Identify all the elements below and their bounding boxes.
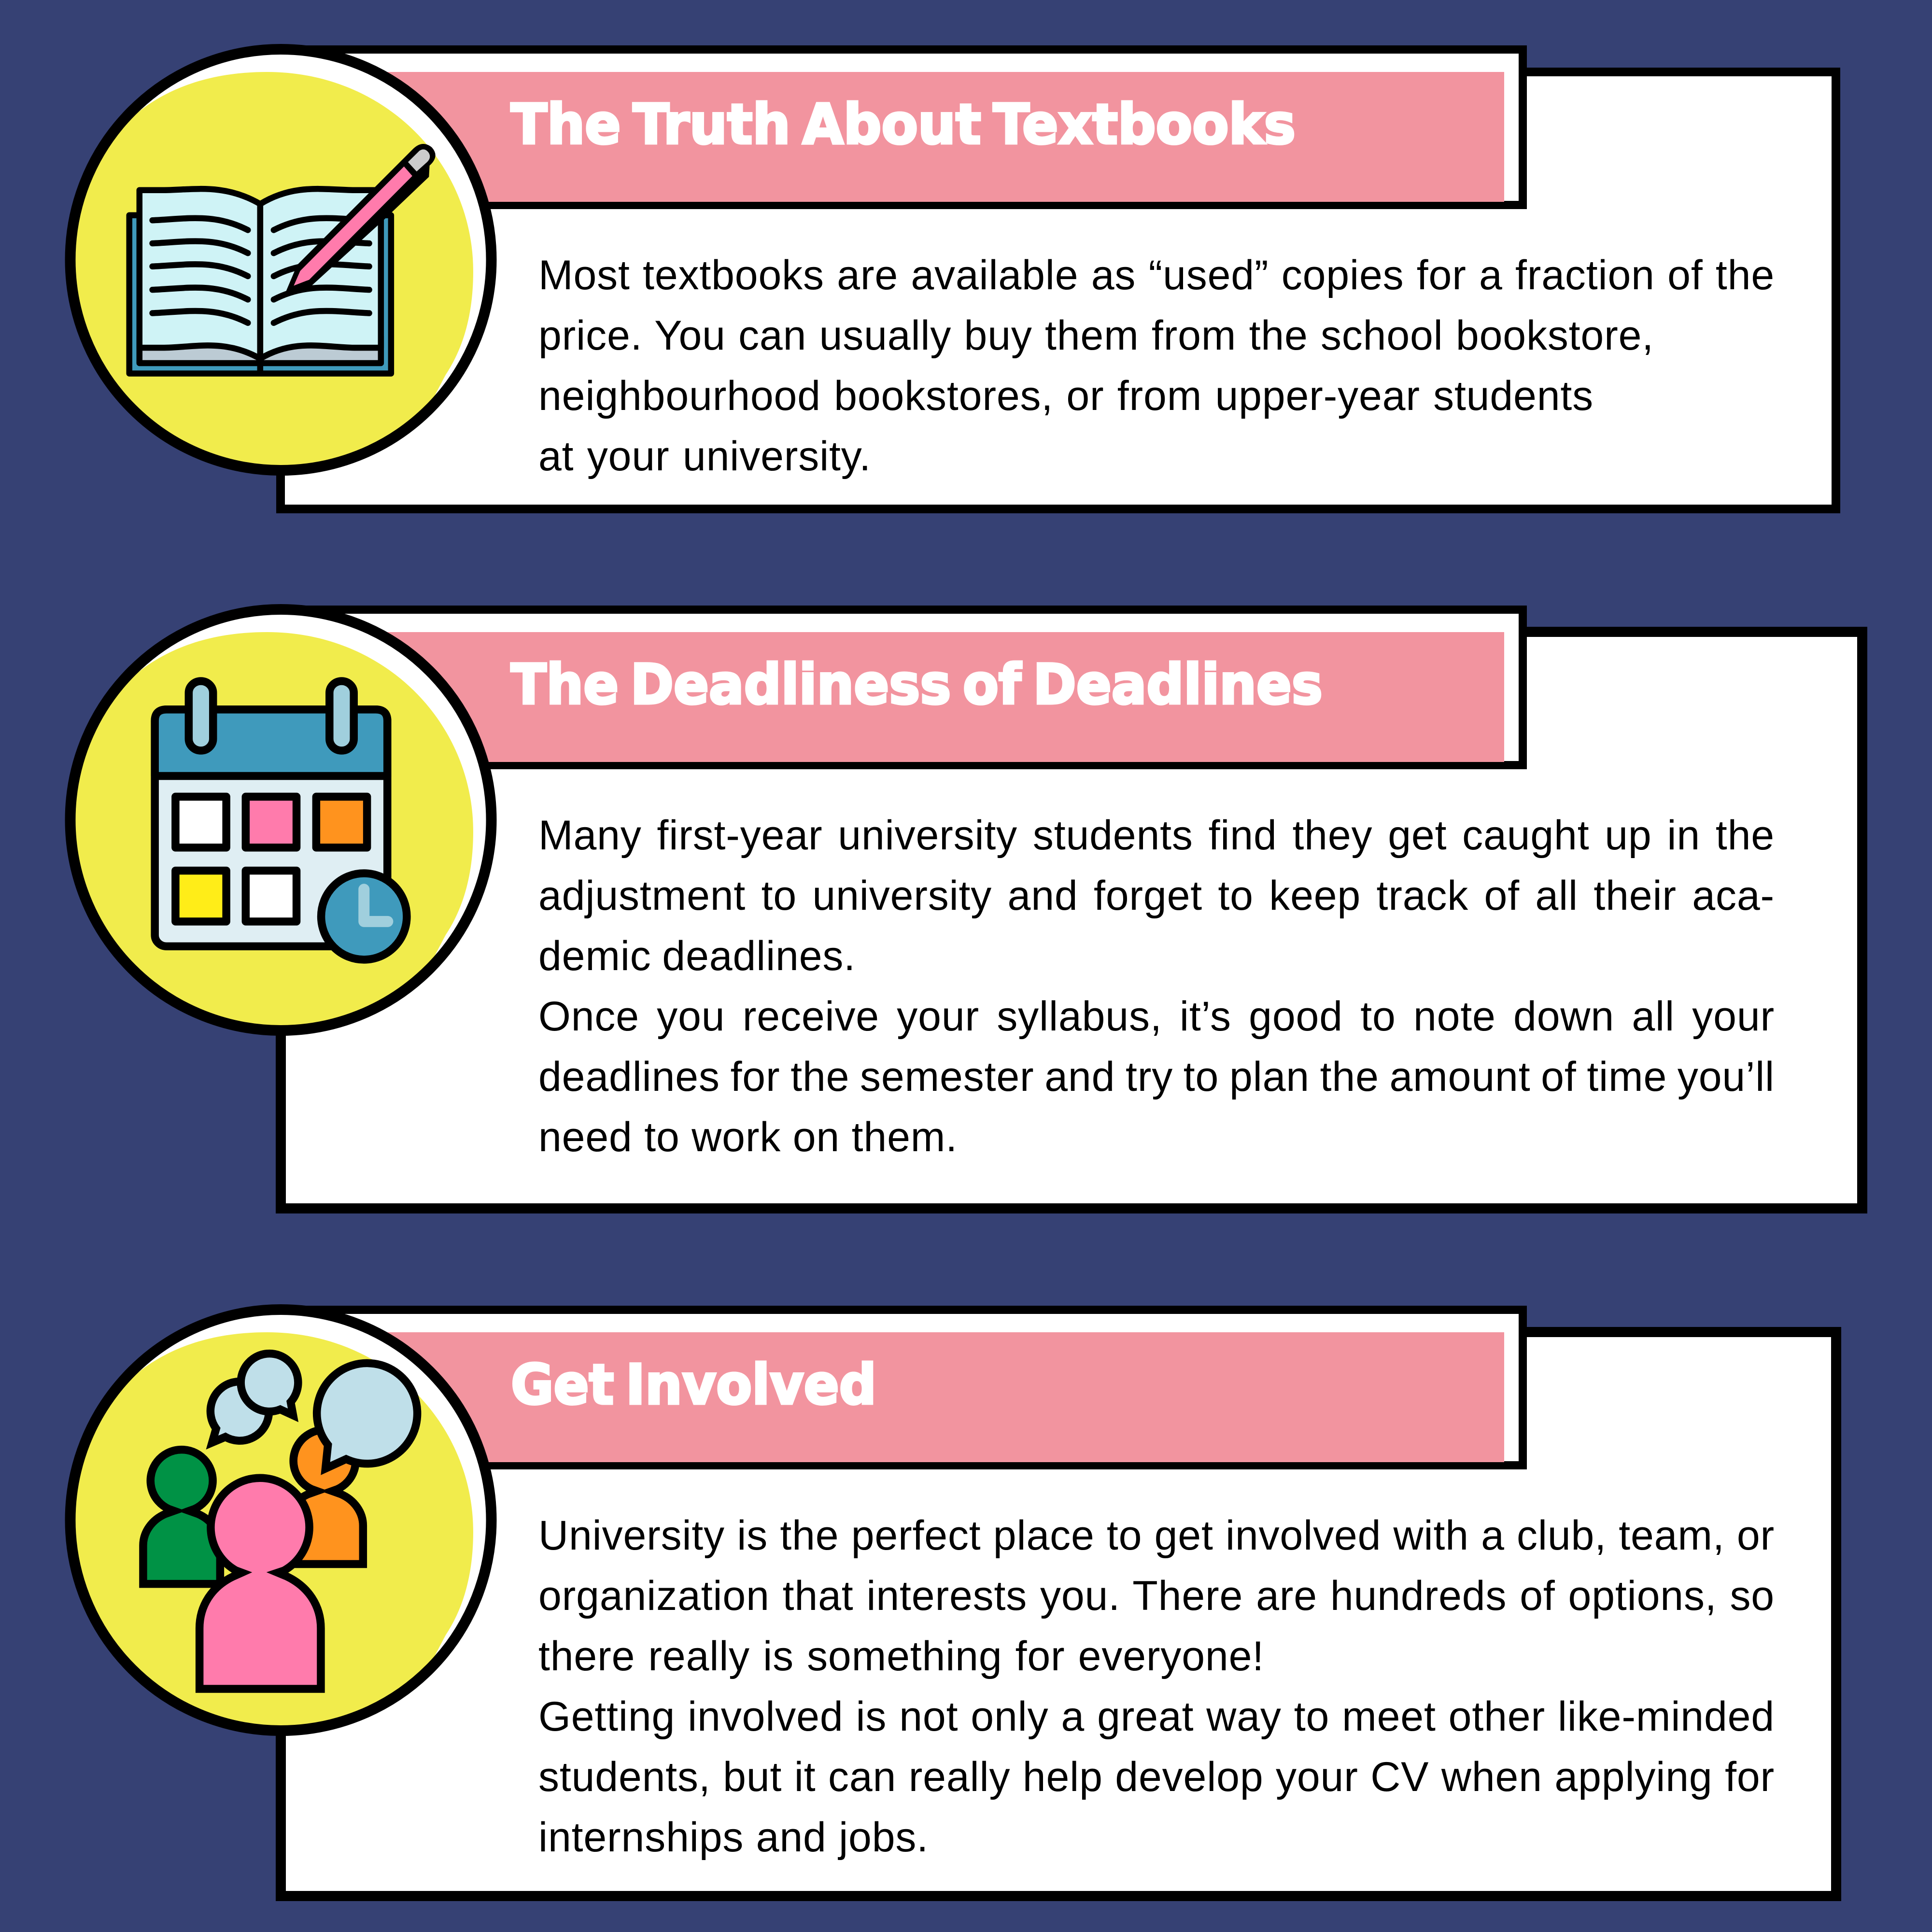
body text: Getting involved is not only a great way to meet other like-minded [538, 1693, 1775, 1740]
heading frame [290, 1306, 1527, 1469]
body text [538, 1506, 1775, 1868]
panel: The Deadliness of Deadlines [65, 604, 1867, 1213]
body text: organization that interests you. There are hundreds of options, so [538, 1573, 1775, 1619]
heading band [290, 72, 1504, 202]
body card [276, 1327, 1841, 1901]
body text: Many first-year university students find they get caught up in the [538, 812, 1775, 859]
body card [276, 627, 1867, 1213]
panel: Get Involved [65, 1304, 1841, 1901]
body text: at your university. [538, 433, 871, 479]
body card [276, 68, 1840, 513]
body text: demic deadlines. [538, 933, 856, 979]
body text: students, but it can really help develop your CV when applying for [538, 1754, 1775, 1800]
icon: calendar with clock [65, 604, 497, 1037]
heading: The Truth About Textbooks [511, 92, 1296, 156]
body text: Most textbooks are available as “used” copies for a fraction of the [538, 252, 1775, 298]
heading band [290, 632, 1504, 762]
heading frame [290, 45, 1527, 209]
heading frame [290, 606, 1527, 769]
icon: open book with pen [65, 44, 497, 477]
body text: Once you receive your syllabus, it’s good to note down all your [538, 993, 1775, 1040]
body text: University is the perfect place to get involved with a club, team, or [538, 1512, 1775, 1559]
body text: need to work on them. [538, 1114, 958, 1160]
body text [538, 245, 1775, 487]
heading: Get Involved [511, 1353, 876, 1417]
body text: internships and jobs. [538, 1814, 929, 1861]
body text: deadlines for the semester and try to plan the amount of time you’ll [538, 1054, 1775, 1100]
body text [538, 805, 1775, 1168]
heading: The Deadliness of Deadlines [511, 652, 1323, 717]
heading band [290, 1332, 1504, 1462]
body text: adjustment to university and forget to keep track of all their aca- [538, 873, 1775, 919]
body text: price. You can usually buy them from the school bookstore, [538, 312, 1654, 359]
panel: The Truth About Textbooks [65, 44, 1840, 513]
body text: there really is something for everyone! [538, 1633, 1264, 1679]
icon: people talking [65, 1304, 497, 1737]
body text: neighbourhood bookstores, or from upper-year students [538, 373, 1594, 419]
